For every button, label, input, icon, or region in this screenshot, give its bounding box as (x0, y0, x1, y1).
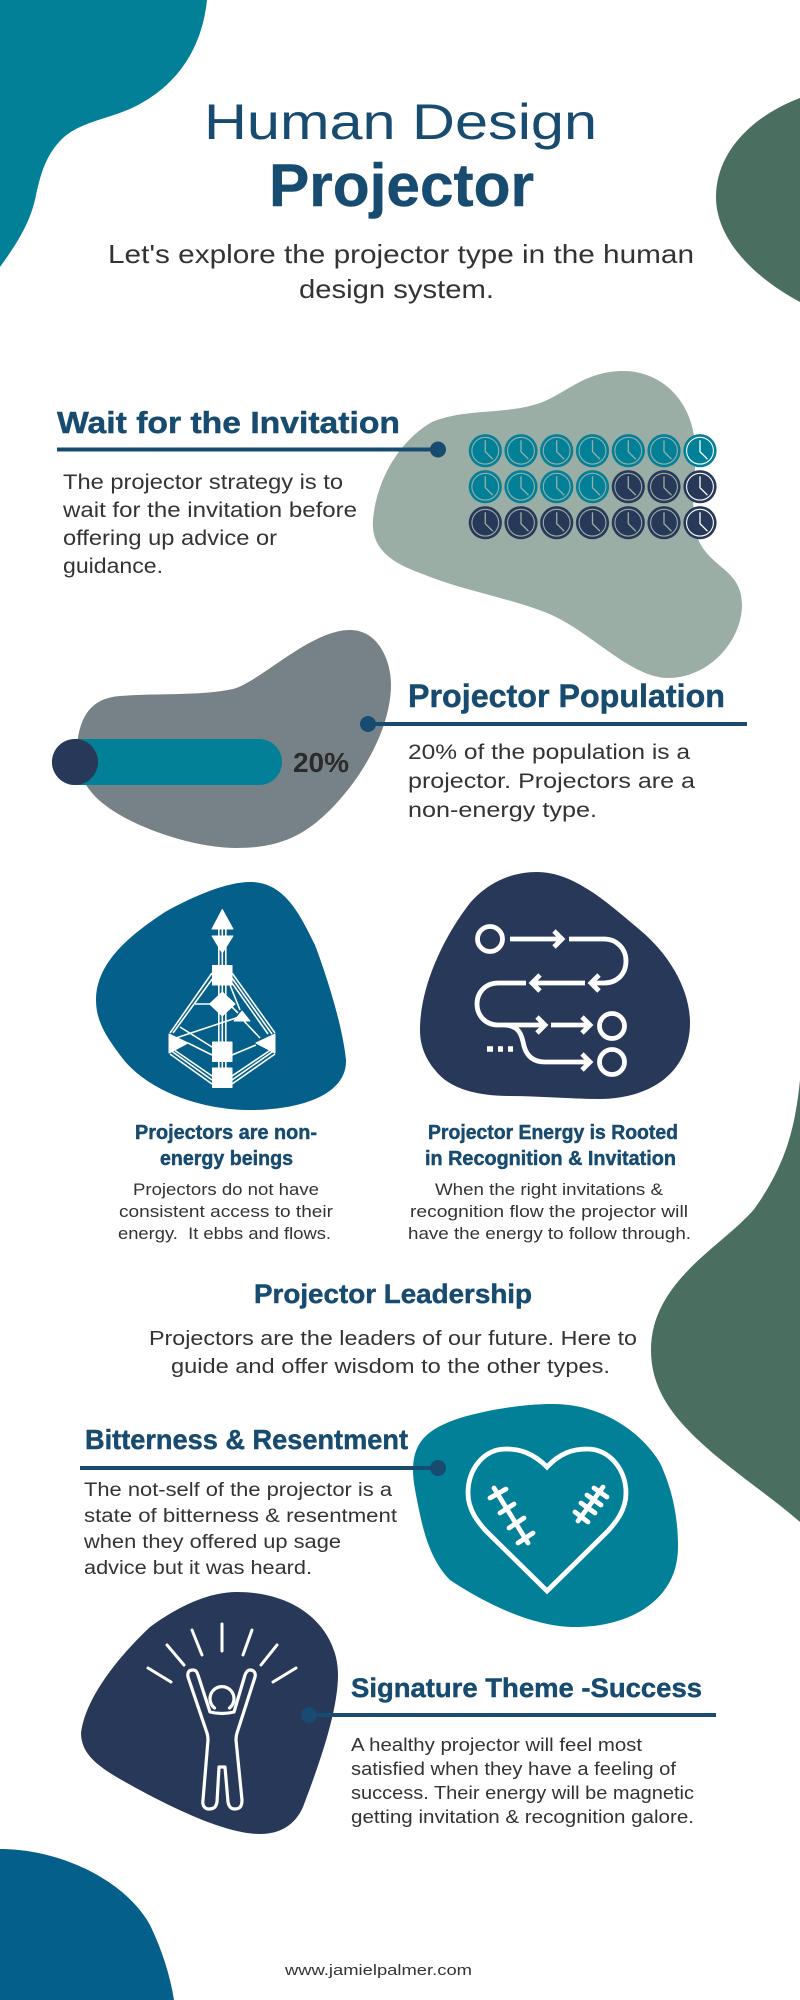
body text: When the right invitations & (435, 1180, 664, 1199)
background blob: bottom left blue (0, 1849, 174, 2000)
heading: projector population: Projector Population (408, 678, 725, 714)
body text (62, 471, 357, 578)
body text: guide and offer wisdom to the other types. (171, 1356, 610, 1378)
subtitle: Let's explore the projector type in the human (108, 239, 694, 269)
blob: navy (420, 872, 690, 1099)
heading: wait for the invitation: Wait for the Invitation (57, 405, 400, 440)
body text: non-energy type. (408, 799, 597, 822)
panel: energy rooted in recognition (408, 872, 691, 1243)
body text: advice but it was heard. (84, 1558, 312, 1579)
background blob: top right green (716, 98, 800, 302)
connector line and dot (301, 1707, 716, 1723)
subtitle: design system. (299, 274, 494, 304)
icon: stitched heart (468, 1449, 626, 1591)
body text: recognition flow the projector will (410, 1202, 688, 1221)
body text: A healthy projector will feel most (351, 1735, 642, 1755)
blob: blue (96, 882, 346, 1110)
body text (351, 1735, 694, 1827)
body text: success. Their energy will be magnetic (351, 1783, 694, 1803)
title (204, 94, 597, 219)
body text (149, 1328, 637, 1378)
heading: non-energy beings (135, 1122, 317, 1170)
body text: Projectors do not have (133, 1180, 319, 1199)
blob: navy (81, 1592, 338, 1834)
blob: sage (373, 371, 742, 678)
body text: wait for the invitation before (62, 499, 357, 522)
panel: non-energy beings (96, 882, 346, 1243)
body text: 20% of the population is a (408, 741, 690, 764)
panel: bitterness and resentment (80, 1404, 678, 1627)
panel: projector population (52, 630, 747, 848)
title: Human Design (204, 94, 597, 150)
value: 20%: 20% (293, 747, 349, 778)
body text: have the energy to follow through. (408, 1224, 691, 1243)
body text (83, 1480, 398, 1579)
body text: The not-self of the projector is a (84, 1480, 392, 1501)
heading: bitterness and resentment: Bitterness & Resentment (85, 1424, 408, 1455)
heading: signature theme: Signature Theme -Success (351, 1673, 702, 1703)
body text (408, 1180, 691, 1243)
clock pictogram grid (469, 434, 717, 539)
footer url: www.jamielpalmer.com (284, 1962, 472, 1979)
title: Projector (269, 152, 534, 219)
blob: slate (77, 630, 391, 848)
body text: energy. It ebbs and flows. (118, 1224, 331, 1243)
body text: offering up advice or (63, 527, 277, 550)
heading: energy rooted: Projector Energy is Rooted (428, 1122, 678, 1144)
body text: when they offered up sage (83, 1532, 341, 1553)
heading: energy rooted (425, 1122, 678, 1170)
body text: consistent access to their (119, 1202, 333, 1221)
body text: guidance. (63, 555, 163, 578)
body text: state of bitterness & resentment (84, 1506, 398, 1527)
body text: getting invitation & recognition galore. (351, 1807, 694, 1827)
body text (118, 1180, 333, 1243)
body text (408, 741, 695, 822)
icon: person with raised arms (148, 1624, 296, 1809)
subtitle (108, 239, 694, 304)
panel: wait for the invitation (57, 371, 742, 678)
connector line and dot (360, 716, 747, 732)
heading: energy rooted: in Recognition & Invitation (425, 1148, 676, 1170)
body text: Projectors are the leaders of our future. Here to (149, 1328, 637, 1350)
icon: human design bodygraph (169, 910, 275, 1088)
blob: teal (413, 1404, 678, 1627)
body text: The projector strategy is to (63, 471, 343, 494)
panel: signature theme (81, 1592, 716, 1834)
heading: non-energy beings: Projectors are non- (135, 1122, 317, 1144)
icon: flow diagram with arrows (477, 926, 626, 1074)
background blob: top left teal (0, 0, 207, 267)
body text: satisfied when they have a feeling of (351, 1759, 677, 1779)
background blob: middle right green (651, 1080, 800, 1522)
panel: projector leadership (149, 1279, 637, 1378)
connector line and dot (57, 442, 446, 458)
heading: projector leadership: Projector Leadership (254, 1279, 532, 1309)
body text: projector. Projectors are a (408, 770, 695, 793)
progress bar 20% (52, 739, 282, 785)
heading: non-energy beings: energy beings (160, 1148, 293, 1170)
connector line and dot (80, 1460, 446, 1476)
